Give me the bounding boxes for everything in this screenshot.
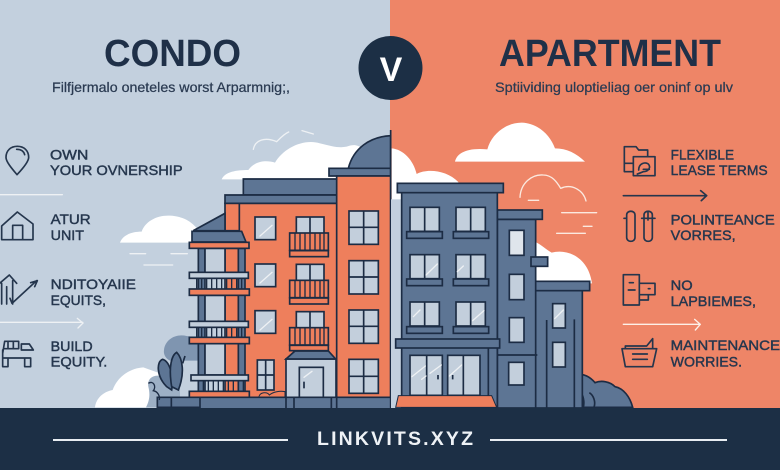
building base bbox=[180, 130, 391, 408]
windows: main block bbox=[407, 207, 489, 333]
panel: condo background bbox=[0, 0, 390, 470]
badge: versus bbox=[358, 36, 422, 100]
text: polinteance vorres: POLINTEANCE bbox=[671, 211, 775, 227]
text: nditoyaiie equits bbox=[51, 276, 136, 308]
cloud: top right bbox=[455, 123, 585, 162]
main block bbox=[397, 183, 503, 408]
third block bbox=[536, 281, 590, 408]
arrow: condo list bbox=[0, 318, 83, 328]
cloud outline and wind lines bbox=[520, 175, 597, 233]
text: polinteance vorres bbox=[671, 211, 775, 243]
text: build equity: EQUITY. bbox=[51, 354, 107, 370]
text: atur unit: ATUR bbox=[51, 211, 91, 227]
text: polinteance vorres: VORRES, bbox=[671, 227, 736, 243]
panel: apartment background bbox=[390, 0, 780, 470]
plant: foreground bbox=[146, 352, 200, 407]
text: nditoyaiie equits: NDITOYAIIE bbox=[51, 276, 136, 292]
entrance bbox=[286, 351, 336, 397]
cloud: bottom left bbox=[95, 367, 160, 407]
text: maintenance worries: WORRIES. bbox=[671, 354, 742, 370]
panel: condo feature list bbox=[0, 146, 213, 407]
windows: tower column bbox=[349, 211, 378, 393]
shrub: right bbox=[578, 375, 633, 407]
text: maintenance worries bbox=[671, 337, 780, 370]
text: build equity bbox=[51, 338, 107, 370]
text: apartment subtitle: Sptiividing uloptieliag oer oninf op ulv bbox=[495, 79, 733, 95]
icon: rising arrow bbox=[0, 275, 37, 304]
balconies: middle column bbox=[290, 217, 328, 351]
text: nditoyaiie equits: EQUITS, bbox=[51, 292, 106, 308]
text: build equity: BUILD bbox=[51, 338, 93, 354]
text: maintenance worries: MAINTENANCE bbox=[671, 337, 780, 353]
shrub: background bbox=[164, 335, 213, 361]
icon: furniture bbox=[3, 341, 33, 367]
badge: versus: V bbox=[380, 51, 403, 89]
footer bar bbox=[0, 408, 780, 470]
ground floor doors bbox=[396, 339, 500, 407]
panel: apartment feature list bbox=[578, 146, 780, 407]
text: no lapbiemes bbox=[671, 277, 756, 309]
heading: apartment: APARTMENT bbox=[499, 33, 721, 75]
text: own your ownership bbox=[50, 146, 183, 178]
text: own your ownership: YOUR OVNERSHIP bbox=[50, 162, 183, 178]
second block bbox=[496, 210, 548, 408]
text: flexible lease terms: FLEXIBLE bbox=[671, 146, 734, 162]
text: no lapbiemes: NO bbox=[671, 277, 693, 293]
cloud: behind apartment bbox=[392, 148, 458, 200]
icon: folders bbox=[624, 147, 655, 176]
icon: open folder bbox=[622, 339, 657, 367]
text: condo subtitle: Filfjermalo oneteles worst Arparmnig;, bbox=[52, 79, 290, 95]
icon: location pin bbox=[6, 146, 29, 175]
icon: drawers bbox=[623, 275, 655, 305]
windows: left column bbox=[255, 217, 276, 390]
arrow: apartment list top bbox=[623, 191, 707, 201]
text: footer url: LINKVITS.XYZ bbox=[317, 428, 473, 450]
heading: condo: CONDO bbox=[104, 33, 241, 75]
icon: house bbox=[2, 212, 33, 240]
text: flexible lease terms: LEASE TERMS bbox=[671, 162, 768, 178]
arrow: apartment list bottom bbox=[623, 319, 700, 330]
balcony tower bbox=[189, 213, 249, 397]
text: no lapbiemes: LAPBIEMES, bbox=[671, 293, 756, 309]
cloud: left mid bbox=[120, 216, 200, 243]
dome bbox=[348, 136, 391, 168]
text: flexible lease terms bbox=[671, 146, 768, 178]
text: atur unit bbox=[51, 211, 91, 243]
illustration: condo building bbox=[180, 130, 391, 408]
text: atur unit: UNIT bbox=[51, 227, 84, 243]
cloud: behind condo bbox=[222, 142, 362, 179]
icon: tubes bbox=[624, 211, 655, 241]
text: own your ownership: OWN bbox=[50, 146, 88, 162]
cloud: right of apartment bbox=[535, 242, 592, 283]
illustration: apartment building bbox=[391, 123, 597, 408]
